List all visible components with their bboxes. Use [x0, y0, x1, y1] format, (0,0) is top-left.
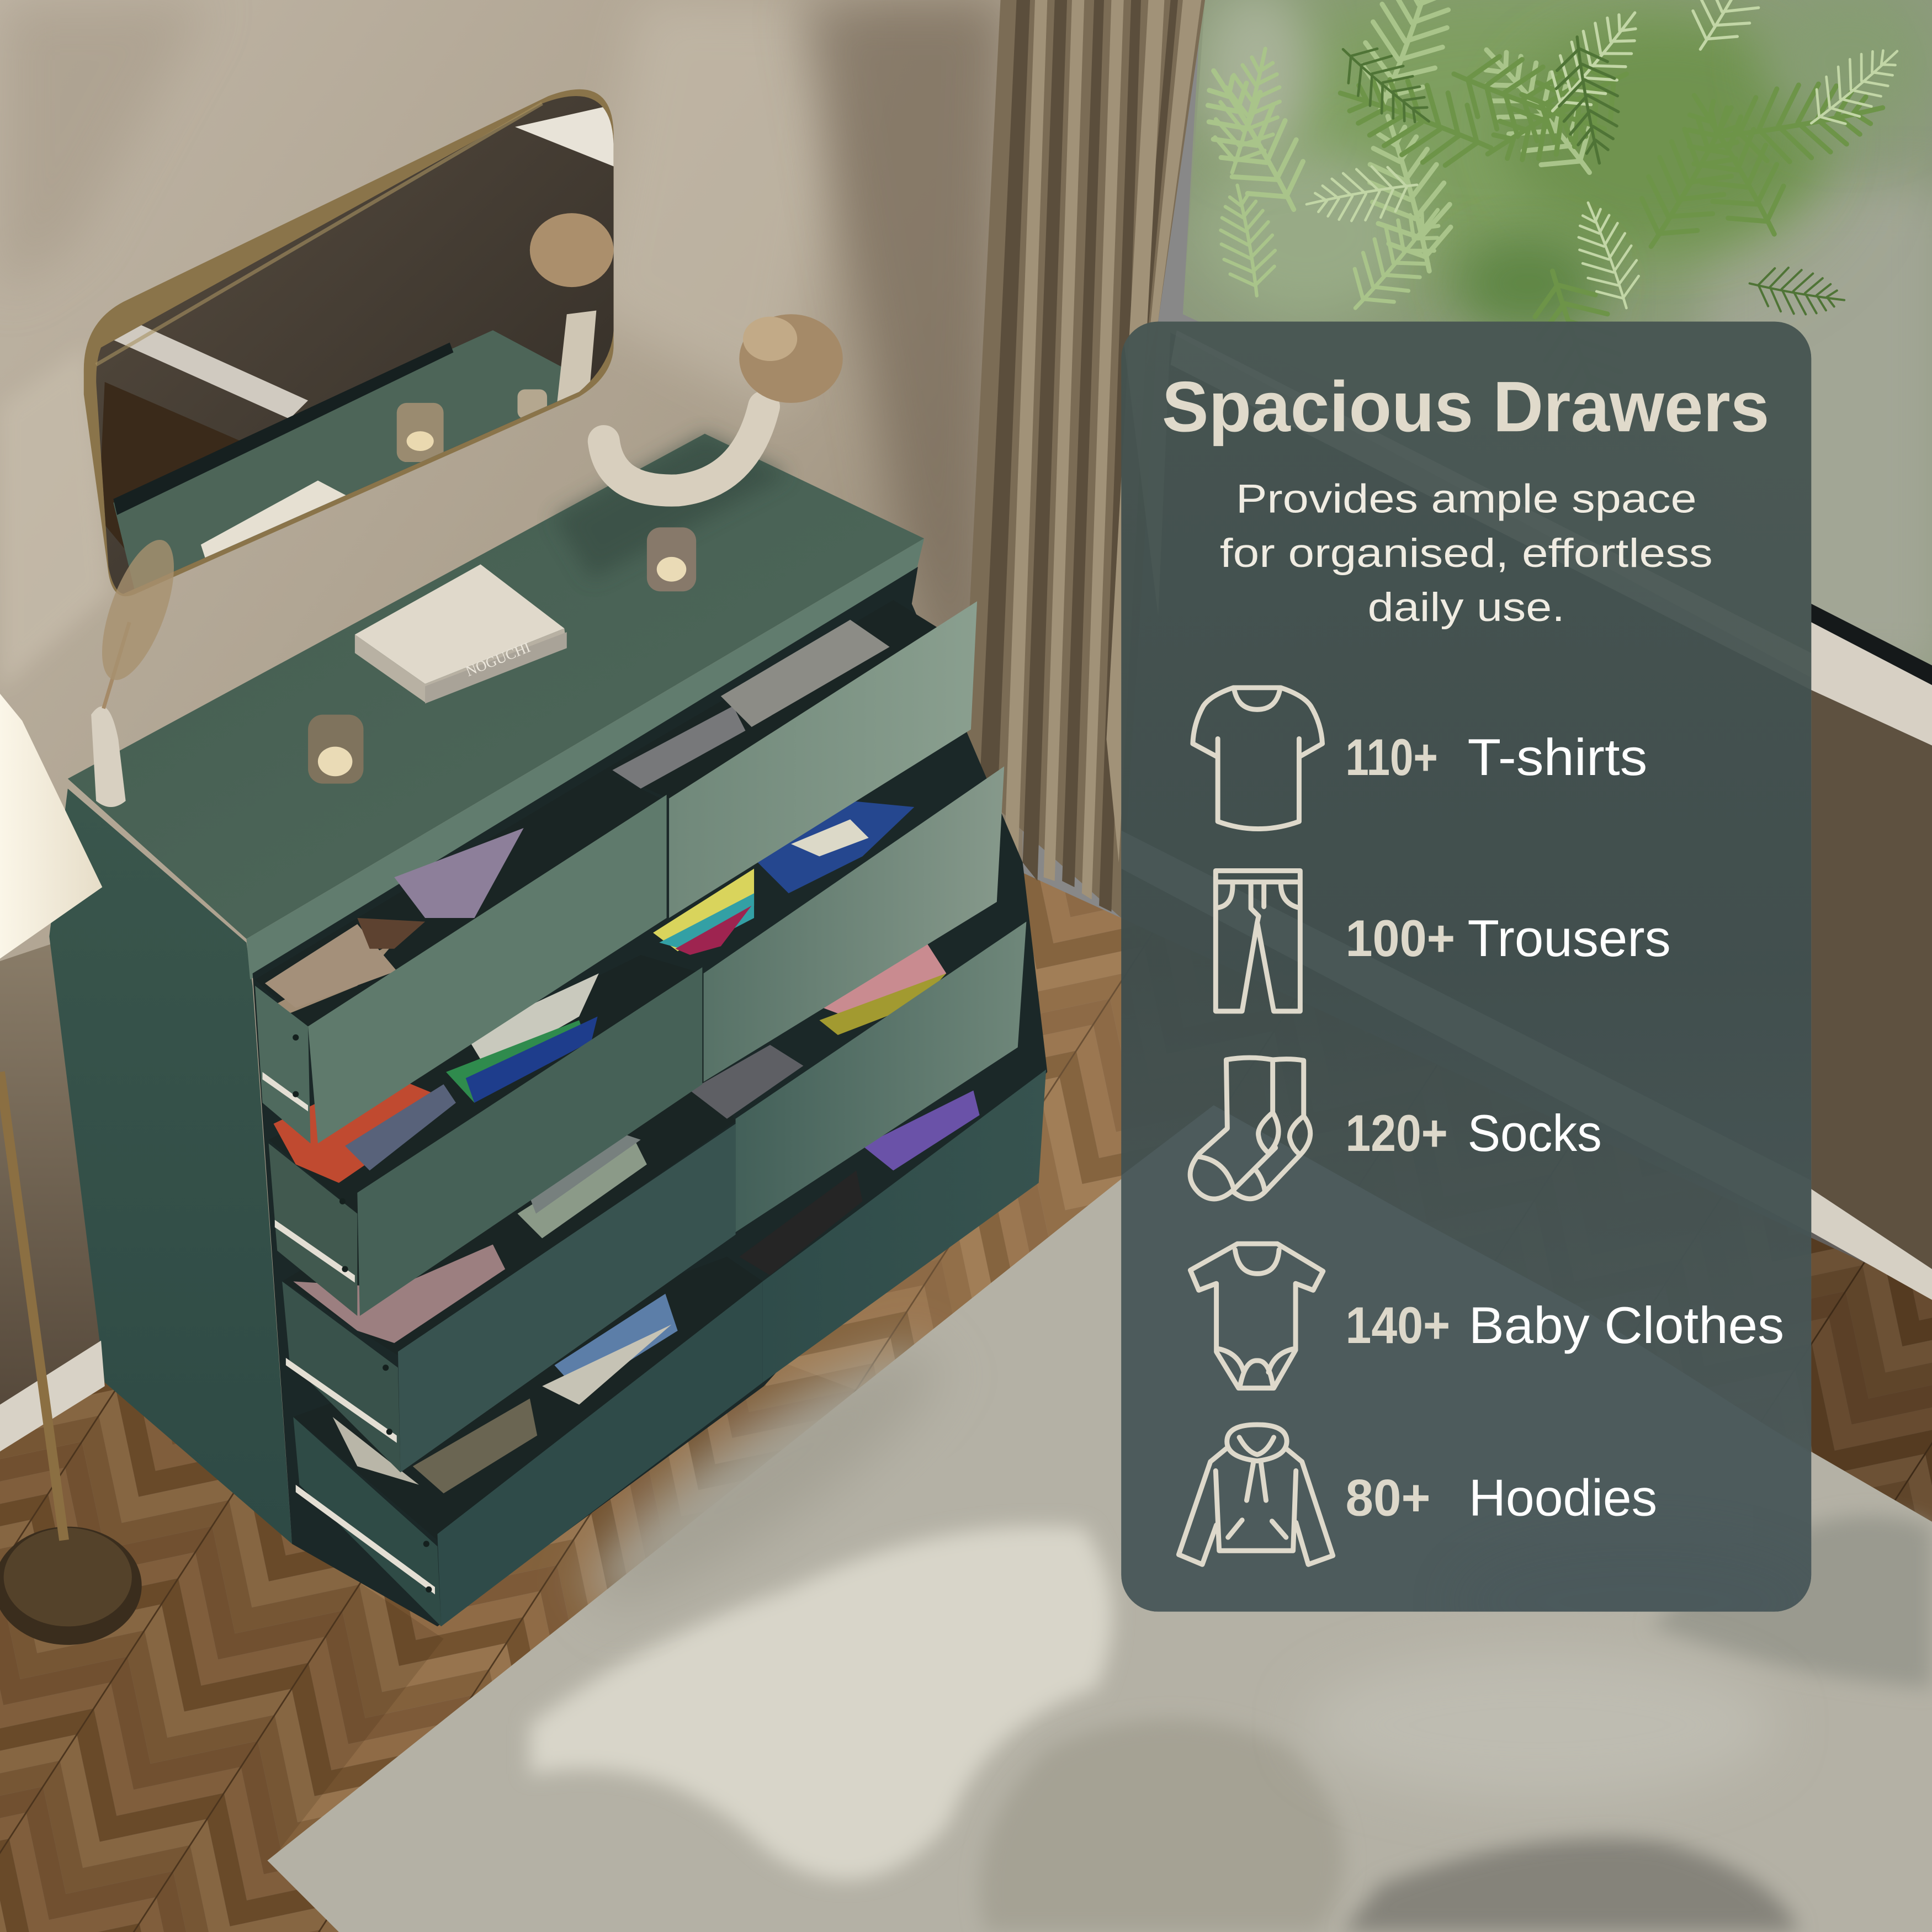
row: 120+ socks: 120+	[1346, 1104, 1448, 1162]
row: 140+ baby clothes: 140+	[1346, 1296, 1450, 1354]
icon: hoodie	[1179, 1425, 1333, 1564]
icon: socks	[1190, 1058, 1310, 1199]
row: 80+ hoodies: Hoodies	[1469, 1469, 1657, 1527]
description text: Provides ample space	[1236, 476, 1697, 522]
row: 120+ socks	[1346, 1104, 1602, 1162]
row: 120+ socks: Socks	[1467, 1104, 1602, 1162]
row: 140+ baby clothes: Baby Clothes	[1469, 1296, 1784, 1354]
heading: Spacious Drawers	[1162, 367, 1769, 447]
row: 80+ hoodies	[1346, 1469, 1657, 1527]
table-top decor: books	[355, 564, 567, 704]
drawer fronts	[308, 601, 1046, 1626]
small vase with pampas grass	[87, 531, 189, 807]
dresser carcass	[49, 434, 1047, 1626]
row: 80+ hoodies: 80+	[1346, 1469, 1431, 1527]
curtain	[961, 0, 1205, 918]
wall background	[0, 0, 1023, 1479]
window frame, sill and right wall	[1811, 604, 1932, 1300]
row: 100+ trousers	[1346, 909, 1671, 967]
candles	[308, 527, 696, 784]
row: 100+ trousers: 100+	[1346, 909, 1455, 967]
wooden herringbone floor	[0, 850, 1932, 1932]
icon: baby bodysuit	[1190, 1244, 1323, 1388]
panel: spacious drawers info card	[1121, 322, 1824, 1663]
baseboard left	[0, 1341, 105, 1451]
drawer side panels and runners	[255, 986, 441, 1626]
open drawer interiors with folded clothes	[255, 600, 980, 1540]
rug	[267, 1105, 1932, 1932]
table-top decor: books: NOGUCHI	[463, 639, 533, 680]
row: 100+ trousers: Trousers	[1467, 909, 1671, 967]
description text	[1220, 476, 1713, 630]
floor lamp	[0, 694, 142, 1645]
ceramic u-shaped vase with dried flowers	[604, 314, 843, 491]
icon: t-shirt	[1193, 688, 1323, 829]
description text: for organised, effortless	[1220, 530, 1713, 576]
row: 110+ t-shirts: 110+	[1346, 728, 1438, 786]
row: 110+ t-shirts: T-shirts	[1467, 728, 1647, 786]
icon: trousers	[1216, 871, 1300, 1011]
window with foliage	[1182, 0, 1932, 678]
row: 110+ t-shirts	[1346, 728, 1647, 786]
description text: daily use.	[1368, 584, 1565, 630]
wall mirror	[74, 74, 628, 604]
